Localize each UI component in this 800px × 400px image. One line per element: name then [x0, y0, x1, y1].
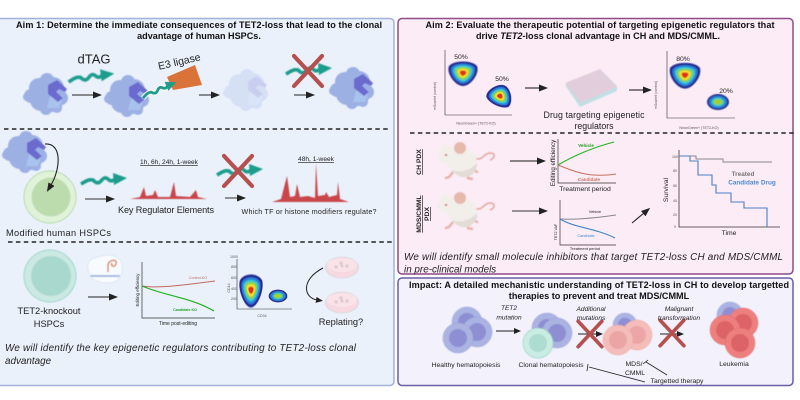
chart: flow plot: 200 — [231, 297, 237, 301]
cells: healthy hematopoiesis — [443, 307, 492, 353]
icon: TET2 protein — [23, 73, 68, 115]
arrow: dTAG squiggle — [68, 69, 115, 83]
chart: survival: Time — [722, 230, 737, 237]
chart: flow plot: CD14 — [227, 283, 231, 293]
icon: HSPC cell — [24, 171, 76, 223]
arrow: blocked squiggle — [217, 164, 263, 176]
icon: tagged protein — [104, 75, 149, 117]
chart: survival: 20 — [673, 213, 677, 217]
arrow: malignant transformation — [660, 333, 678, 335]
chart: TET2 VAF: Vehicle — [589, 210, 601, 214]
icon: E3 ligase — [167, 65, 202, 90]
inhibition lines: targeted therapy — [587, 360, 667, 382]
label: TET2 mutation: TET2 — [501, 305, 517, 312]
label: TET2-knockout HSPCs: TET2-knockout — [17, 306, 81, 316]
icon: red cross — [224, 156, 252, 186]
chart: flow plot after: NeonGreen+ (TET2-KO) — [679, 126, 719, 130]
label: TET2-knockout HSPCs: HSPCs — [34, 319, 65, 329]
chart: flow plot after: 80% — [676, 56, 690, 63]
arrow: to chart — [88, 296, 110, 298]
arrow: tag linker — [140, 78, 178, 99]
text: aim 1 conclusion: advantage — [5, 356, 52, 367]
chart: flow plot: 1000 — [230, 255, 238, 259]
text: aim 1 conclusion: We will identify the key epigenetic regulators contributing to TET2-loss clonal — [5, 343, 357, 354]
arrow: MDS to chart — [512, 210, 540, 212]
chart: survival: Survival — [663, 177, 670, 202]
label: MDS/CMML PDX: MDS/CMML — [416, 195, 423, 233]
chart: flow plot: CD34 — [257, 314, 267, 318]
panel: aim 1 — [0, 18, 394, 386]
chart: survival: Candidate Drug — [728, 180, 776, 186]
arrow: squiggle — [81, 173, 127, 185]
arrow: additional mutations — [578, 333, 597, 335]
icon: degraded protein — [223, 69, 268, 111]
chart: survival: Treated — [732, 171, 754, 178]
label: replating: Replating? — [319, 317, 363, 327]
label: E3 ligase: E3 ligase — [157, 51, 202, 73]
label: TF question: Which TF or histone modifiers regulate? — [242, 208, 377, 216]
label: CH PDX: CH PDX — [416, 149, 423, 175]
chart: CH editing efficiency: Treatment period — [559, 186, 611, 193]
screening row — [433, 50, 735, 131]
chart: early peaks — [130, 182, 207, 199]
chart: survival: 60 — [673, 184, 677, 188]
chart: flow plot after — [654, 51, 735, 130]
arrow: to peaks — [85, 198, 107, 200]
chart: TET2 VAF: Candidate — [577, 234, 595, 238]
degradation row — [23, 51, 374, 117]
label: leukemia: Leukemia — [719, 361, 749, 368]
icon: MDS mouse — [437, 192, 494, 229]
chart: flow plot before: 50% — [495, 76, 509, 83]
label: malignant transformation: transformation — [658, 315, 700, 322]
cells: MDS/CMML — [603, 313, 652, 355]
label: MDS/CMML: CMML — [625, 370, 645, 377]
icon: restored protein — [329, 67, 374, 109]
chart: TET2 VAF: TET2 VAF — [554, 223, 558, 240]
chart: CH editing efficiency: Editing efficiency — [550, 139, 557, 186]
label: modified human HSPCs: Modified human HSPCs — [6, 228, 111, 238]
icon: CH mouse — [437, 142, 494, 179]
chart: editing efficiency: Time post-editing — [159, 321, 197, 327]
regulatory element row — [2, 131, 377, 238]
icon: red cross — [294, 56, 322, 86]
icon: CRISPR guide — [88, 255, 122, 283]
chart: flow plot before: 50% — [454, 54, 468, 61]
chart: flow plot after: 20% — [719, 88, 733, 95]
arrow: step 1 — [72, 94, 94, 96]
icon: red cross — [660, 320, 684, 346]
chart: flow plot after: mScarlet (control) — [654, 81, 658, 109]
label: MDS/CMML: MDS/ — [626, 361, 643, 368]
icon: modified protein — [2, 131, 47, 173]
icon: culture dish — [326, 257, 358, 278]
label: TET2 mutation: mutation — [496, 314, 522, 322]
heading: impact: therapies to prevent and treat MDS/CMML — [509, 291, 690, 301]
text: aim 2 conclusion: in pre-clinical models — [404, 264, 496, 276]
label: additional mutations: mutations — [577, 315, 606, 322]
icon: knockout cell — [24, 250, 76, 302]
chart: TET2 VAF — [554, 200, 616, 251]
panel: impact — [398, 278, 793, 386]
arrow: step 3 — [294, 94, 307, 96]
arrow: to result plot — [629, 89, 644, 91]
chart: flow plot before: NeonGreen+ (TET2-KO) — [456, 122, 496, 126]
arrow: to drug plate — [525, 87, 540, 89]
chart: flow plot before: mScarlet (control) — [433, 82, 437, 110]
chart: CH editing efficiency: Vehicle — [578, 143, 594, 148]
chart: CH editing efficiency: Candidate — [578, 177, 601, 182]
chart: flow plot before — [433, 50, 516, 126]
icon: replated dish — [326, 292, 358, 313]
arrow: CH to chart — [510, 160, 538, 162]
chart: flow plot — [227, 255, 292, 318]
arrow: to survival — [632, 213, 644, 223]
label: time points: 1h, 6h, 24h, 1-week — [140, 159, 199, 166]
label: additional mutations: Additional — [576, 306, 606, 313]
chart: flow plot: 400 — [231, 287, 237, 291]
arrow: TET2 mutation — [496, 330, 515, 332]
chart: flow plot: 800 — [231, 265, 237, 269]
heading: aim 2: drive TET2-loss clonal advantage in CH and MDS/CMML. — [476, 31, 720, 41]
chart: survival: 40 — [673, 199, 677, 203]
arrow: replating — [306, 268, 323, 300]
chart: survival: 0 — [674, 225, 676, 229]
arrow: blocked squiggle — [286, 63, 332, 75]
chart: CH editing efficiency — [550, 139, 616, 193]
label: key regulator elements: Key Regulator Elements — [118, 205, 214, 215]
label: late time points: 48h, 1-week — [298, 156, 335, 163]
chart: editing efficiency — [135, 262, 215, 327]
text: aim 2 conclusion: We will identify small molecule inhibitors that target TET2-loss CH and MDS/CMML — [404, 252, 783, 263]
chart: survival: 100 — [672, 155, 678, 159]
chart: editing efficiency: Candidate KO — [173, 308, 197, 312]
label: malignant transformation: Malignant — [665, 306, 694, 313]
heading: impact: Impact: A detailed mechanistic understanding of TET2-loss in CH to develop targetted — [409, 280, 789, 290]
label: clonal hematopoiesis: Clonal hematopoiesis — [518, 362, 584, 369]
chart: late peaks — [272, 163, 349, 202]
knockout row — [17, 250, 363, 329]
chart: editing efficiency: Editing efficiency — [135, 273, 140, 306]
chart: survival: 80 — [673, 169, 677, 173]
icon: drug plate — [565, 69, 617, 107]
cells: clonal hematopoiesis — [523, 313, 572, 358]
chart: survival — [663, 150, 780, 237]
label: targetted therapy: Targetted therapy — [651, 378, 704, 385]
cells: leukemia — [710, 302, 758, 358]
heading: aim 1: Aim 1: Determine the immediate consequences of TET2-loss that lead to the clonal — [16, 20, 382, 30]
label: healthy hematopoiesis: Healthy hematopoiesis — [432, 362, 501, 369]
PDX row — [416, 139, 780, 251]
chart: flow plot: 600 — [231, 276, 237, 280]
chart: editing efficiency: Control-KO — [189, 276, 207, 280]
label: dTAG: dTAG — [78, 52, 110, 66]
arrow: protein into cell — [45, 144, 58, 185]
arrow: to late peaks — [225, 197, 238, 199]
label: drug targeting: Drug targeting epigenetic — [544, 110, 645, 120]
label: MDS/CMML PDX: PDX — [424, 207, 431, 221]
heading: aim 2: Aim 2: Evaluate the therapeutic potential of targeting epigenetic regulators that — [426, 20, 774, 30]
panel: aim 2 — [398, 18, 794, 276]
arrow: step 2 — [199, 94, 212, 96]
icon: red cross — [578, 321, 602, 347]
chart: TET2 VAF: Treatment period — [570, 246, 600, 251]
heading: aim 1: advantage of human HSPCs. — [137, 31, 261, 41]
label: drug targeting: regulators — [574, 121, 614, 131]
